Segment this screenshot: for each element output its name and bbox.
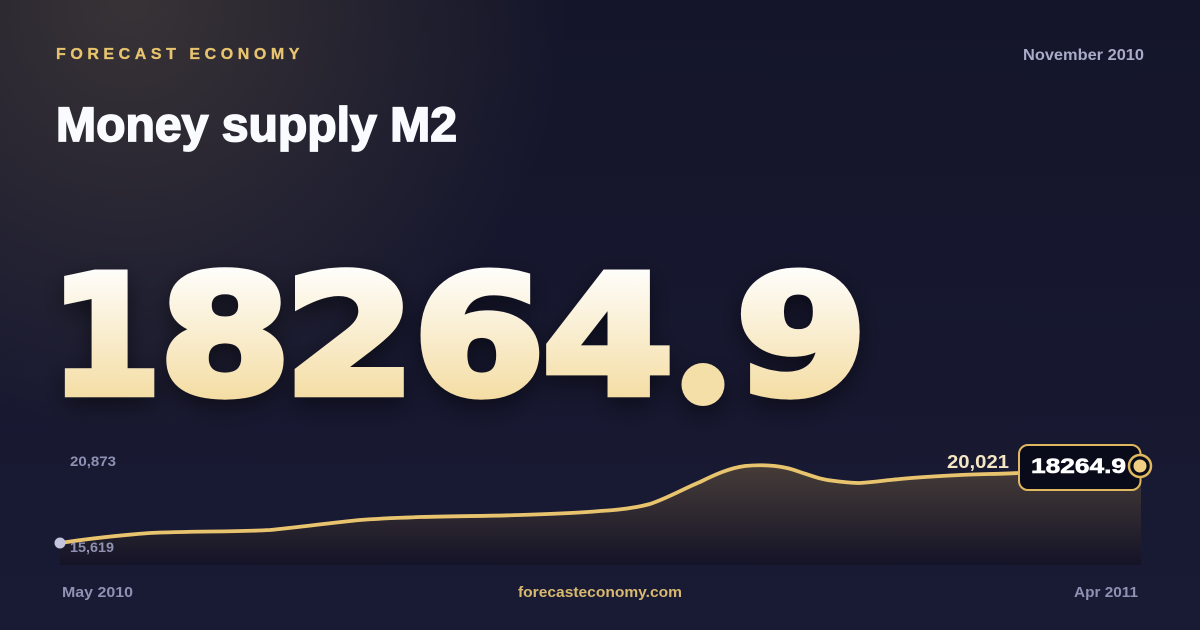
big value: 8264 (159, 240, 674, 432)
chart line (60, 465, 1018, 543)
title: Money supply M2 (56, 99, 457, 152)
big value (50, 240, 867, 433)
current value callout: 18264.9 (1031, 455, 1126, 478)
brand label: FORECAST ECONOMY (56, 46, 304, 63)
big value: 9 (735, 240, 867, 432)
min label: 15,619 (70, 539, 114, 555)
axis start label: May 2010 (62, 584, 133, 601)
start point (54, 538, 66, 548)
max label: 20,873 (70, 453, 116, 469)
date: November 2010 (1023, 47, 1144, 64)
chart area fill (60, 465, 1141, 565)
current value callout (1019, 445, 1140, 490)
source url: forecasteconomy.com (518, 584, 682, 601)
chart: M2 sparkline (54, 445, 1151, 565)
current point marker (1129, 455, 1151, 477)
big value: 1 (50, 242, 162, 433)
peak-side value label: 20,021 (947, 452, 1009, 472)
big value: . (678, 302, 722, 418)
axis end label: Apr 2011 (1074, 584, 1138, 601)
